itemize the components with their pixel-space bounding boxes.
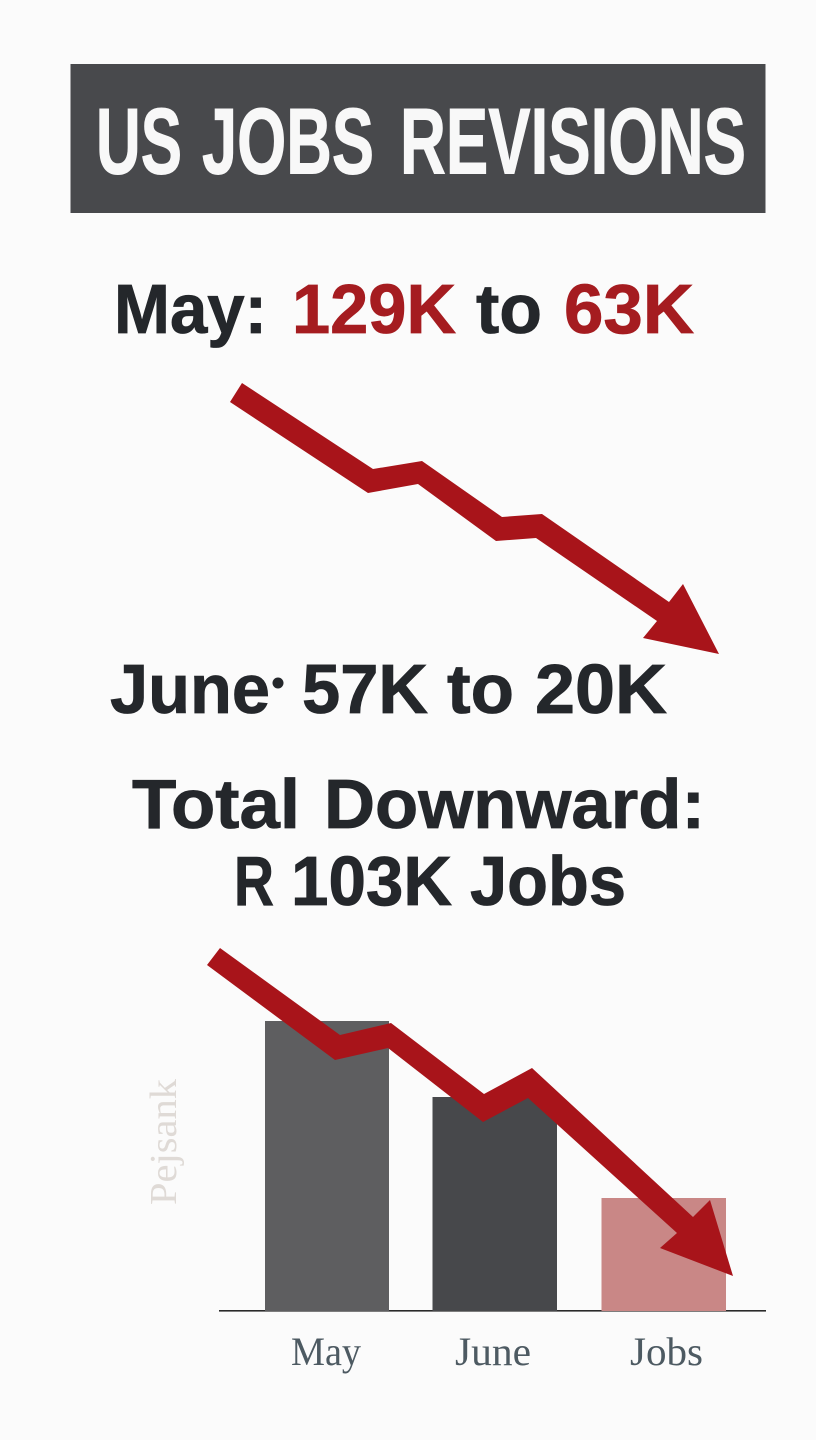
text: June revision: 20K xyxy=(535,650,667,728)
title banner: JOBS xyxy=(202,88,374,194)
arrow: chart downward trend xyxy=(207,948,733,1276)
text: June revision: to xyxy=(447,650,514,728)
baseline xyxy=(219,1310,766,1312)
text: total downward: Jobs xyxy=(470,842,626,920)
text: May revision: May: xyxy=(114,270,267,348)
label: Jobs: Jobs xyxy=(630,1329,703,1374)
text: total downward: R xyxy=(234,842,274,920)
title banner xyxy=(70,64,766,213)
text: June revision: June xyxy=(110,650,270,728)
text: total downward: Downward: xyxy=(324,765,705,843)
text: June revision: 57K xyxy=(302,650,428,728)
arrow: top downward trend xyxy=(230,383,719,654)
text: June revision xyxy=(110,650,667,728)
text: total downward xyxy=(132,765,705,920)
y axis label: Pejsank xyxy=(143,1079,185,1205)
text: May revision: 129K xyxy=(292,270,456,348)
text: total downward: 103K xyxy=(291,842,452,920)
label: June: June xyxy=(455,1329,531,1374)
text: May revision: to xyxy=(476,270,542,348)
text: May revision xyxy=(114,270,694,348)
label: May: May xyxy=(291,1329,361,1374)
bar: June xyxy=(432,1097,557,1311)
text: total downward: Total xyxy=(132,765,300,843)
bar: May xyxy=(265,1021,389,1311)
title banner: US xyxy=(96,88,182,194)
bar chart xyxy=(143,948,766,1374)
bar: Jobs xyxy=(602,1198,726,1311)
text: May revision: 63K xyxy=(564,270,694,348)
